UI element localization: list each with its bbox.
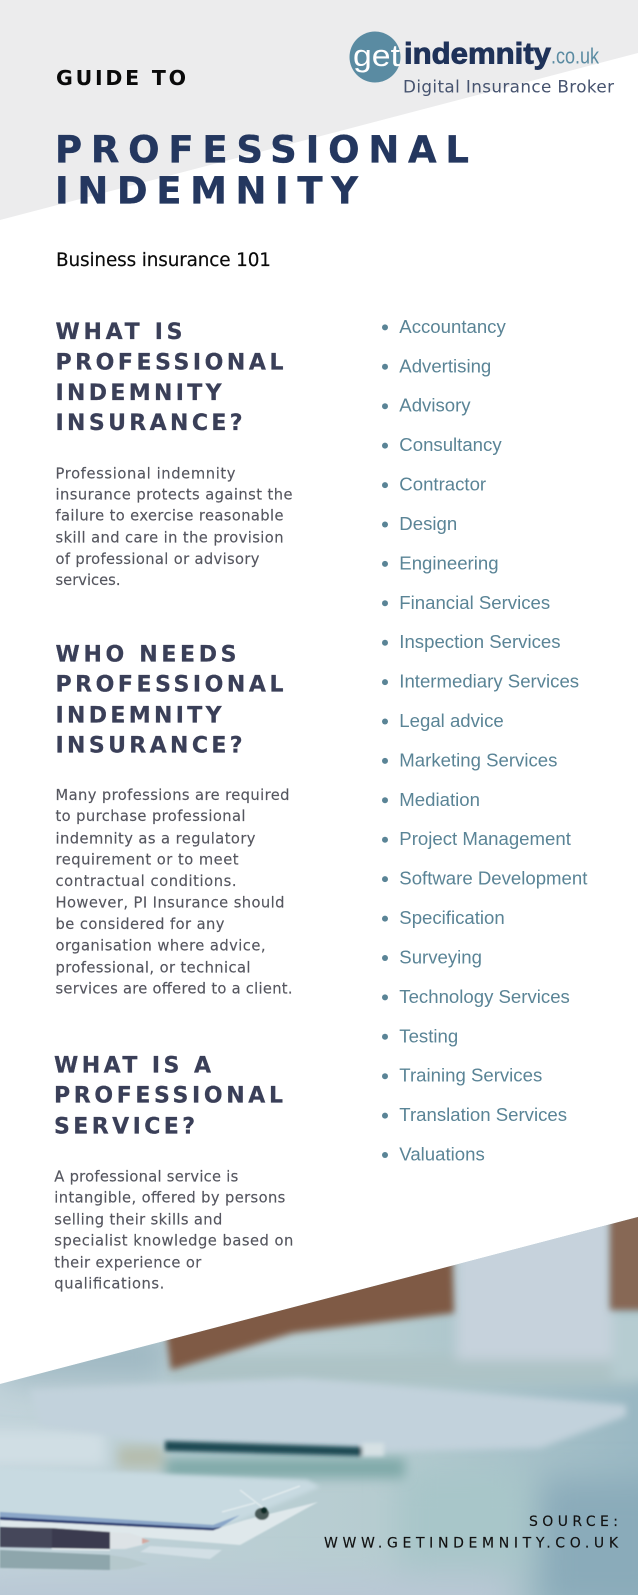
bulleted list of professions: Advertising <box>399 355 491 376</box>
body text: PI definition: of professional or advisory <box>56 551 260 568</box>
source credit: SOURCE: <box>529 1514 618 1530</box>
body text: who needs: be considered for any <box>56 916 225 933</box>
body text: who needs: to purchase professional <box>56 808 246 825</box>
body text: PI definition: services. <box>56 572 120 589</box>
heading: what is PI insurance: INSURANCE? <box>56 411 242 436</box>
notebook cover <box>35 1472 318 1524</box>
bulleted list of professions: Intermediary Services <box>399 671 579 692</box>
body text: who needs: contractual conditions. <box>56 873 236 890</box>
heading: professional service <box>54 1053 283 1139</box>
bulleted list of professions: Consultancy <box>399 434 502 455</box>
binder clip <box>255 1508 269 1520</box>
body text: PI definition: failure to exercise reasonable <box>56 508 284 525</box>
body text: who needs: requirement or to meet <box>56 851 239 868</box>
logo: getindemnity.co.uk <box>350 32 614 96</box>
kicker: guide to: GUIDE TO <box>56 66 186 90</box>
heading: what is PI insurance <box>56 320 284 436</box>
bulleted list of professions: Advisory <box>399 395 471 416</box>
title: professional indemnity: PROFESSIONAL <box>55 129 469 172</box>
body text: professional service: specialist knowledge based on <box>54 1233 293 1250</box>
bulleted list of professions: Financial Services <box>399 592 550 613</box>
bulleted list of professions: Accountancy <box>399 316 506 337</box>
blue page edges <box>0 1512 240 1529</box>
body text: professional service: intangible, offered by persons <box>54 1190 285 1207</box>
title: professional indemnity: INDEMNITY <box>55 169 359 212</box>
section: who needs PI insurance <box>56 643 292 997</box>
reflection of pen <box>0 1550 110 1570</box>
bulleted list of professions: Mediation <box>399 789 480 810</box>
heading: professional service: PROFESSIONAL <box>54 1084 283 1109</box>
heading: what is PI insurance: PROFESSIONAL <box>56 350 284 375</box>
body text: professional service: their experience or <box>54 1254 202 1271</box>
bulleted list of professions: Marketing Services <box>399 749 557 770</box>
bulleted list of professions: Translation Services <box>399 1104 567 1125</box>
body text: who needs <box>56 787 292 997</box>
logo circle <box>350 32 400 82</box>
bulleted list of professions: Design <box>399 513 457 534</box>
source credit: WWW.GETINDEMNITY.CO.UK <box>324 1536 619 1552</box>
body text: who needs: professional, or technical <box>56 959 250 976</box>
pen grip <box>52 1528 110 1549</box>
pen tip <box>108 1534 144 1550</box>
heading: who needs: WHO NEEDS <box>56 643 236 668</box>
bulleted list of professions: Software Development <box>399 868 588 889</box>
logo tagline: Digital Insurance Broker <box>403 76 614 96</box>
body text: professional service: qualifications. <box>54 1275 164 1292</box>
source credit <box>324 1514 619 1552</box>
body text: professional service <box>54 1169 293 1292</box>
body text: who needs: Many professions are required <box>56 787 290 804</box>
logo word: indemnity: indemnity <box>404 38 551 70</box>
bulleted list of professions: Technology Services <box>399 986 570 1007</box>
body text: PI definition: skill and care in the provision <box>56 529 284 546</box>
title: professional indemnity <box>55 129 469 212</box>
bulleted list of professions: Project Management <box>399 828 572 849</box>
bulleted list of professions: Inspection Services <box>399 631 561 652</box>
heading: who needs: INSURANCE? <box>56 733 242 758</box>
bulleted list of professions: Training Services <box>399 1065 542 1086</box>
bulleted list of professions <box>382 316 588 1164</box>
body text: PI definition: Professional indemnity <box>56 465 236 482</box>
header grey diagonal panel <box>0 0 638 220</box>
section: what is professional indemnity insurance <box>56 320 292 589</box>
body text: PI definition <box>56 465 292 589</box>
heading: who needs: PROFESSIONAL <box>56 673 284 698</box>
bulleted list of professions: Specification <box>399 907 505 928</box>
bulleted list of professions: Surveying <box>399 946 482 968</box>
logo word: .co.uk: .co.uk <box>551 44 600 68</box>
bulleted list of professions: Legal advice <box>399 710 504 731</box>
bulleted list of professions: Testing <box>399 1025 458 1046</box>
body text: professional service: selling their skills and <box>54 1211 222 1228</box>
heading: professional service: SERVICE? <box>54 1114 195 1139</box>
section: what is a professional service <box>54 1053 293 1292</box>
reflected pages <box>140 1546 222 1559</box>
heading: who needs <box>56 643 284 758</box>
bulleted list of professions: Valuations <box>399 1144 485 1164</box>
photo panel: blurred desk with notebook and pen <box>0 1200 638 1595</box>
bulleted list of professions: Engineering <box>399 552 499 573</box>
heading: what is PI insurance: WHAT IS <box>56 320 182 345</box>
logo word: get: get <box>353 38 400 73</box>
body text: who needs: services are offered to a client. <box>56 980 292 997</box>
body text: PI definition: insurance protects against the <box>56 486 292 503</box>
body text: who needs: organisation where advice, <box>56 938 266 955</box>
pen barrel <box>0 1527 52 1548</box>
lower pages <box>0 1502 318 1545</box>
binder clip wire <box>222 1486 300 1512</box>
heading: what is PI insurance: INDEMNITY <box>56 381 223 406</box>
body text: professional service: A professional service is <box>54 1169 238 1186</box>
body text: who needs: However, PI Insurance should <box>56 894 284 911</box>
heading: professional service: WHAT IS A <box>54 1053 211 1078</box>
body text: who needs: indemnity as a regulatory <box>56 830 256 847</box>
heading: who needs: INDEMNITY <box>56 703 223 728</box>
bulleted list of professions: Contractor <box>399 474 486 495</box>
subtitle: Business insurance 101 <box>56 250 271 271</box>
